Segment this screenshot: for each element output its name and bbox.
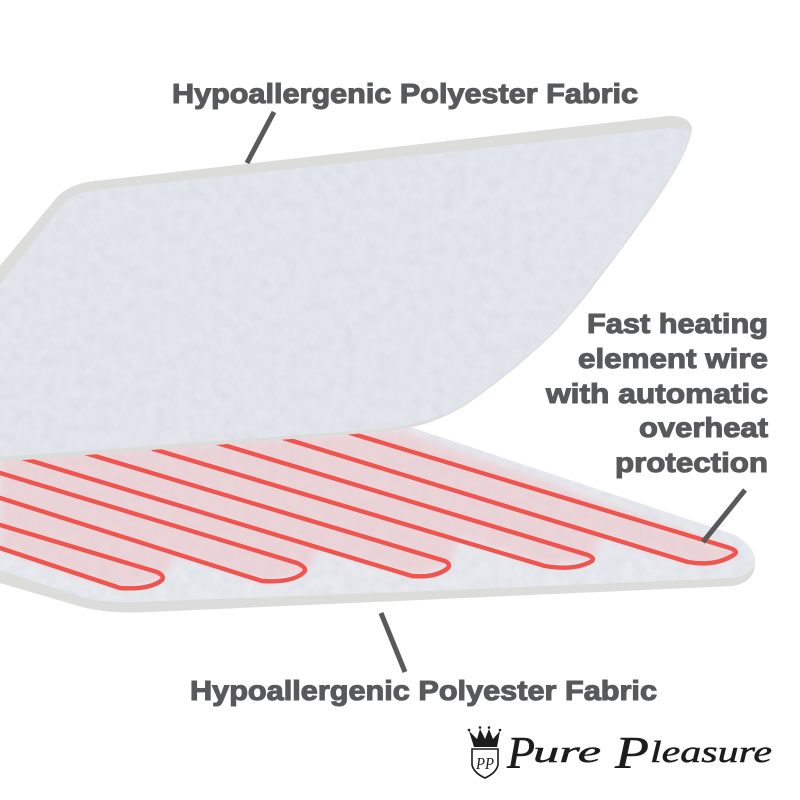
wordmark: leasure	[650, 734, 772, 769]
wordmark	[506, 727, 772, 778]
heat tint around wire	[0, 430, 740, 589]
lower sheet felt surface	[0, 426, 755, 602]
text block: heating wire description: with automatic	[545, 378, 768, 409]
wordmark: P	[506, 727, 535, 778]
text block: heating wire description	[545, 308, 768, 478]
panel: lower fabric sheet	[0, 426, 755, 612]
text block: heating wire description: overheat	[639, 412, 768, 443]
heating element wire	[0, 433, 736, 588]
arrow: heating wire leader	[703, 490, 745, 542]
wire loop 2	[0, 472, 305, 581]
text block: heating wire description: protection	[615, 447, 768, 478]
text block: heating wire description: element wire	[578, 343, 768, 374]
text block: heating wire description: Fast heating	[587, 308, 768, 339]
wire loop 3	[22, 453, 449, 576]
arrow: top fabric leader	[247, 112, 274, 163]
heading: bottom fabric label: Hypoallergenic Polyester Fabric	[190, 675, 657, 706]
arrow: bottom fabric leader	[381, 613, 405, 672]
logo: Pure Pleasure	[468, 726, 772, 778]
wire loop 5	[283, 433, 736, 563]
heading: top fabric label: Hypoallergenic Polyester Fabric	[172, 78, 638, 109]
icon: crown	[468, 726, 501, 747]
icon: shield	[472, 749, 498, 778]
lower sheet edge	[0, 426, 755, 612]
upper sheet edge	[0, 116, 692, 462]
shield monogram: PP	[475, 754, 494, 773]
panel: upper fabric sheet	[0, 116, 692, 462]
wire loop 4	[153, 443, 593, 568]
wire loop 1	[0, 524, 163, 588]
upper sheet felt surface	[0, 128, 690, 457]
wordmark: P	[614, 727, 649, 778]
wordmark: ure	[533, 734, 601, 769]
